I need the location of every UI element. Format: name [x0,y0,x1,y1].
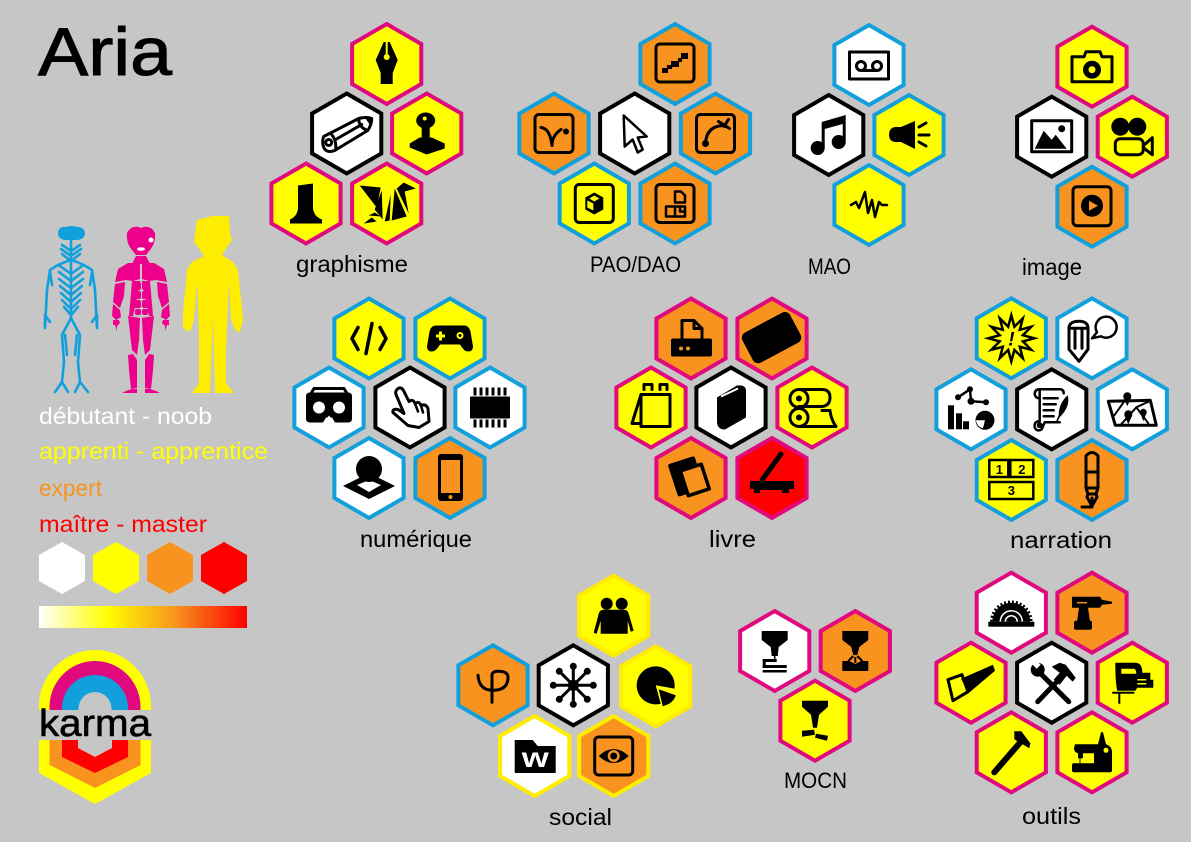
hex: bezier tool [681,94,750,174]
label: outils: outils [1022,803,1081,829]
panel: outils [936,573,1167,829]
hex: video camera [1098,97,1167,177]
hex: network asterisk [539,645,608,725]
hex: stamp [392,94,461,174]
hex: speaker [874,95,944,175]
figure: nervous system [45,226,97,392]
hex: paper sheet stack [616,368,686,448]
hex: map with pins [1098,369,1167,449]
hex: cube tool [560,164,629,244]
hex: fountain pen [1057,440,1127,520]
hex: pen nib [352,24,421,104]
panel: livre [616,298,847,552]
hex: laser cutter [821,611,890,691]
label: narration: narration [1010,527,1112,553]
karma logo [39,650,152,804]
hex: hand saw [936,643,1006,723]
hex: hammer [977,712,1046,792]
label: livre: livre [709,526,756,552]
hex: sewing machine [1057,712,1127,792]
hex: people [579,576,648,656]
panel: MAO [794,25,944,279]
legend hexagons [39,542,247,594]
hex: charts [936,369,1006,449]
panel: graphisme [271,24,461,277]
hex: paper cutter [737,438,807,518]
panel: narration [936,298,1167,553]
hex: comic burst: ! [1008,329,1015,350]
hex: wiki folder [500,716,569,796]
hex: milling machine [740,611,809,691]
hex: stair line tool [640,24,710,104]
hex: pencil [312,94,381,174]
hex: boot shape [271,164,341,244]
legend text: expert [39,475,103,501]
legend text: apprenti - apprentice [39,438,268,464]
hex: augmented reality marker [334,438,404,518]
figure: body [183,216,243,393]
hex: comic burst [977,298,1046,378]
hex: jigsaw [1098,643,1167,723]
label: PAO/DAO: PAO/DAO [590,252,681,277]
hex: origami bird [352,164,421,244]
hex: paper rolls [777,368,847,448]
hex: microchip [455,368,525,448]
hex: pointing hand [375,368,445,448]
hex: wiki folder: w [520,742,549,773]
label: MAO: MAO [808,254,851,279]
hex: picture [1017,97,1086,177]
hex: black block [737,298,807,378]
legend text: maître - master [39,511,207,537]
label: graphisme: graphisme [296,251,408,277]
panel: numérique [294,298,525,552]
hex: code [334,298,404,378]
label: numérique: numérique [360,526,472,552]
hex: smartphone [415,438,485,518]
hex: music note [794,95,863,175]
panel: PAO/DAO [519,24,750,277]
hex: pie chart [621,646,690,726]
panel: image [1017,27,1167,280]
hex: drill [1057,573,1127,653]
label: image: image [1022,254,1082,280]
hex: cassette [834,25,904,105]
hex: comic panels: 3 [1008,483,1015,498]
hex: pencil with speech bubble [1057,298,1127,378]
hex: play [1057,167,1127,247]
title: Aria [38,14,172,90]
hex: curve node tool [519,94,589,174]
hex: plasma cutter [780,681,850,761]
hex: eye [579,716,648,796]
panel: social [458,576,690,830]
hex: book [696,368,766,448]
hex: phi symbol [458,645,528,725]
figures: nerves, muscles, body [45,216,243,393]
hex: crossed hammer and wrench [1017,643,1086,723]
legend text: débutant - noob [39,403,212,429]
hex: cursor [600,94,669,174]
hex: camera [1057,27,1127,107]
hex: comic panels: 1 [996,462,1003,477]
level gradient bar [39,606,247,628]
hex: cards [656,438,726,518]
label: MOCN: MOCN [784,768,847,793]
hex: waveform [834,165,904,245]
panel: MOCN [740,611,890,793]
hex: comic panels: 2 [1018,462,1026,477]
hex: VR headset [294,368,364,448]
figure: muscles [112,227,170,393]
hex: comic panels [977,440,1046,520]
label: social: social [549,804,612,830]
hex: circular saw blade [977,573,1046,653]
hex: gamepad [415,298,485,378]
karma logo: karma [39,703,152,745]
legend text [39,403,268,537]
hex: script and quill [1017,369,1086,449]
hex: pages layout tool [640,164,710,244]
hex: printer [656,298,726,378]
